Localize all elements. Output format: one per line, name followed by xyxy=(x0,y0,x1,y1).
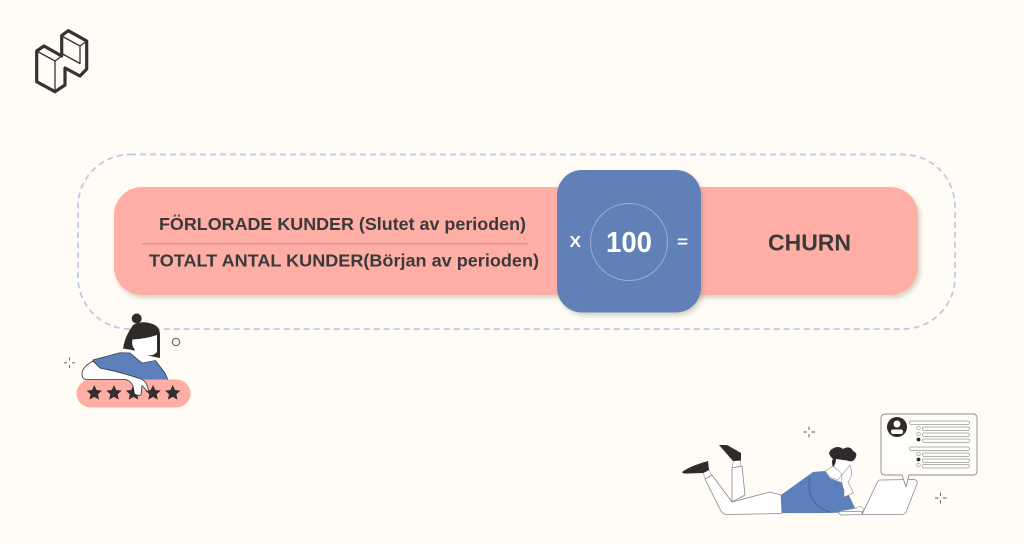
user avatar xyxy=(887,417,907,437)
shirt xyxy=(93,353,168,381)
circle outline xyxy=(590,204,668,280)
back leg and sock xyxy=(732,460,741,468)
hair xyxy=(829,447,856,467)
illustration: man with laptop xyxy=(682,414,977,515)
laptop xyxy=(839,480,917,515)
shoes xyxy=(682,445,741,474)
text: equals: = xyxy=(677,234,688,251)
face xyxy=(834,458,851,474)
rating pill xyxy=(76,380,190,408)
text: denominator: TOTALT ANTAL KUNDER(Början av perioden) xyxy=(149,250,539,270)
selected options xyxy=(917,438,920,441)
face and neck xyxy=(131,335,157,362)
shirt xyxy=(781,471,857,513)
icon: logo xyxy=(37,31,87,92)
dashed thought outline xyxy=(78,154,955,329)
hair and bun xyxy=(123,314,160,358)
shirt fold xyxy=(809,478,830,512)
speech bubble xyxy=(881,414,977,487)
sparkles xyxy=(804,426,946,504)
front sock xyxy=(703,470,712,480)
fraction divider xyxy=(142,243,528,244)
panel: churn formula bar xyxy=(114,187,918,295)
sparkle xyxy=(64,358,75,368)
survey lines xyxy=(910,421,970,468)
text: 100: 100 xyxy=(606,227,652,259)
stars xyxy=(87,385,180,400)
arm and hand xyxy=(82,361,149,395)
front leg and trousers xyxy=(705,475,782,514)
collar xyxy=(826,466,842,480)
text: x: X xyxy=(570,234,581,251)
text: result: CHURN xyxy=(768,230,851,256)
small ring xyxy=(172,338,180,346)
text: numerator: FÖRLORADE KUNDER (Slutet av perioden) xyxy=(159,214,526,234)
panel: multiplier xyxy=(557,170,701,312)
illustration: woman with stars xyxy=(64,314,190,408)
keyboard hand xyxy=(840,506,864,514)
hand and forearm xyxy=(842,465,854,497)
